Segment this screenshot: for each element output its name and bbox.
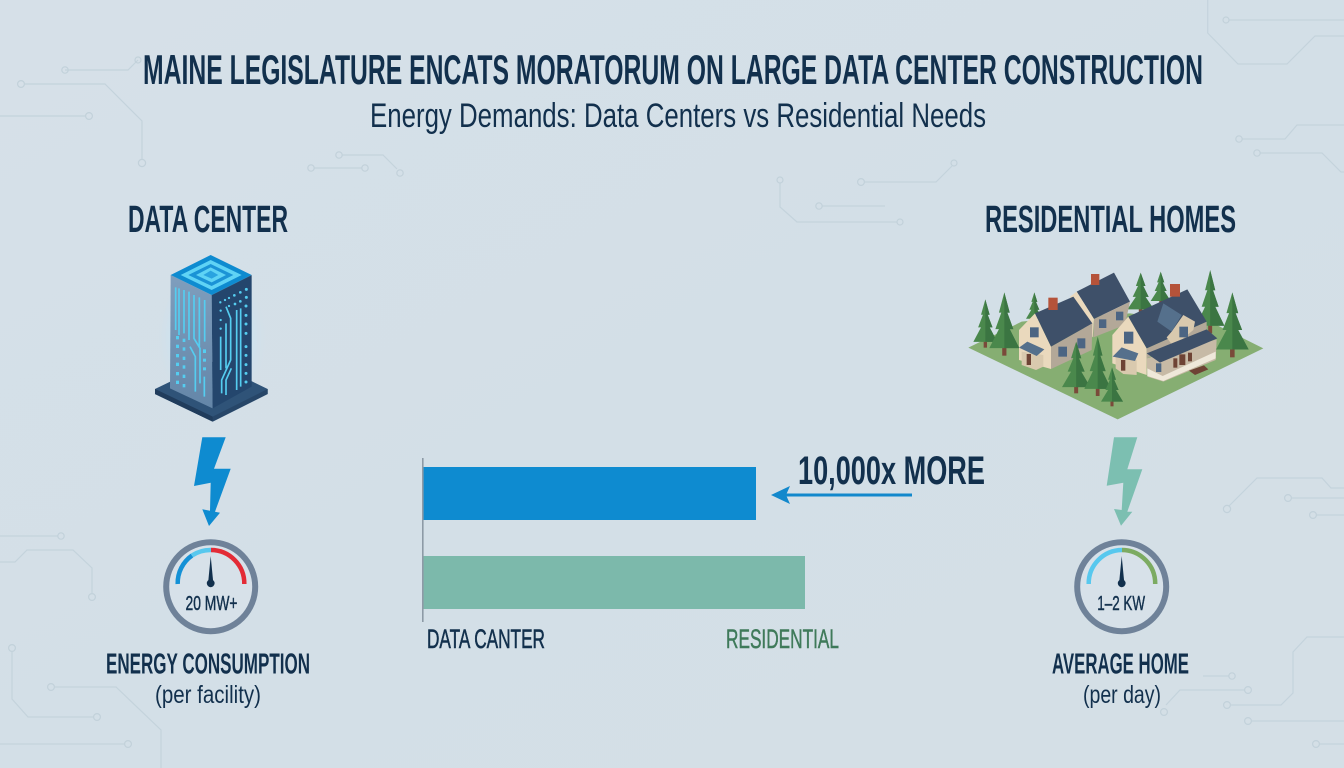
icon: blue lightning bolt bbox=[194, 437, 231, 526]
bar: residential bbox=[423, 556, 805, 609]
icon: gauge 20 MW+ bbox=[166, 542, 255, 631]
icon: data center building bbox=[153, 253, 270, 422]
icon: gauge 1-2 KW bbox=[1077, 542, 1166, 631]
callout: 10,000x more: 10,000x MORE bbox=[798, 449, 985, 493]
heading: data center: DATA CENTER bbox=[128, 199, 288, 241]
bar chart bbox=[422, 449, 985, 654]
icon: gauge 20 MW+: 20 MW+ bbox=[186, 593, 238, 615]
label: energy consumption: ENERGY CONSUMPTION bbox=[106, 648, 310, 680]
icon: teal lightning bolt bbox=[1107, 437, 1142, 526]
label: data canter: DATA CANTER bbox=[427, 624, 545, 654]
panel: data center bbox=[106, 199, 310, 709]
bar: data center bbox=[423, 467, 756, 520]
label: per day: (per day) bbox=[1083, 681, 1161, 709]
label: residential: RESIDENTIAL bbox=[726, 624, 839, 654]
label: per facility: (per facility) bbox=[155, 681, 261, 709]
label: average home: AVERAGE HOME bbox=[1052, 648, 1189, 680]
arrow: callout to data center bar bbox=[771, 486, 912, 504]
icon: isometric neighborhood bbox=[968, 270, 1263, 419]
icon: gauge 1-2 KW: 1–2 KW bbox=[1097, 593, 1145, 615]
subtitle: Energy Demands: Data Centers vs Residential Needs bbox=[370, 97, 986, 135]
panel: residential homes bbox=[968, 199, 1263, 709]
